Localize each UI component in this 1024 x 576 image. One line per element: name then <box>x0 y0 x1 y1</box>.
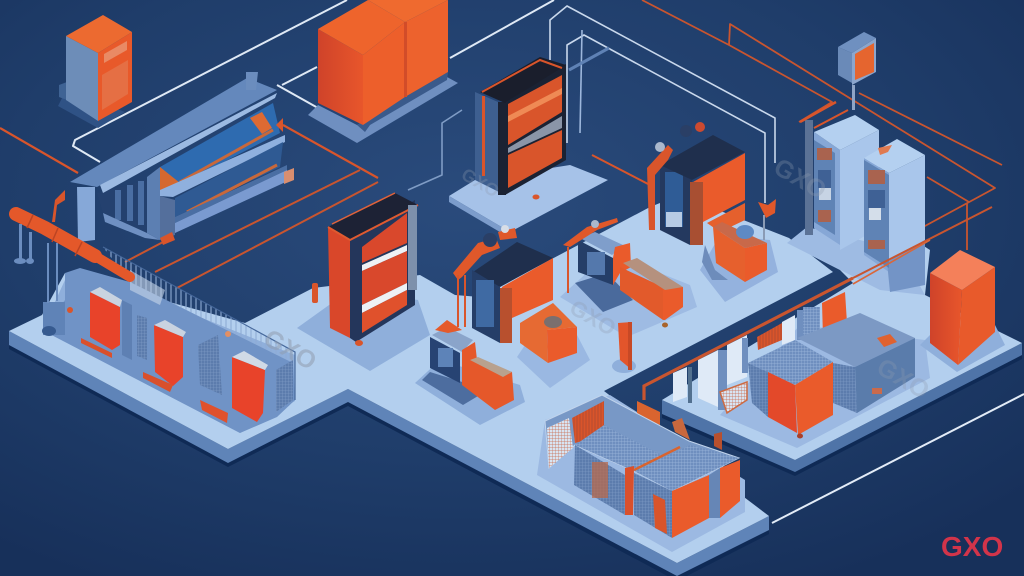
red mesh panel <box>757 323 782 350</box>
tower 2 <box>864 139 925 292</box>
orange box right <box>930 250 995 365</box>
machine: right of centre <box>563 218 683 328</box>
right platform machinery <box>644 207 992 438</box>
cabinet: top left <box>58 15 132 128</box>
floor shadows under machines <box>42 227 1005 552</box>
tower 1 <box>814 115 879 250</box>
watermark labels: GXO <box>872 353 934 405</box>
fence wall with orange panels <box>42 243 295 433</box>
centre machine with robot arm <box>453 225 577 363</box>
logo: GXO <box>941 531 1003 562</box>
big orange block <box>308 0 458 143</box>
orange panel 2 <box>154 320 186 386</box>
machine: rear centre on plate <box>449 57 608 238</box>
bottom machine <box>545 395 740 538</box>
watermark labels: GXO <box>458 164 503 201</box>
orange panel 1 <box>90 287 122 350</box>
rear grey box <box>797 313 915 413</box>
watermark labels: GXO <box>769 153 831 205</box>
orange pipe <box>14 214 130 277</box>
orange panel 3 <box>232 351 268 422</box>
watermark labels <box>259 153 934 405</box>
tall machine with three panels <box>312 193 418 346</box>
floor: main platform <box>9 195 833 576</box>
machine: rear right with small tank <box>647 122 776 282</box>
watermark labels: GXO <box>259 324 321 376</box>
front orange crate <box>748 340 833 438</box>
centre machine tank <box>520 303 577 363</box>
conveyor machine <box>52 72 294 245</box>
front machine with conveyor <box>422 320 514 410</box>
small red-orange post <box>618 322 632 370</box>
watermark labels: GXO <box>566 295 620 341</box>
towers <box>800 102 925 292</box>
orange back panel <box>822 292 847 337</box>
floor: right platform <box>662 205 1022 476</box>
small box on pole <box>838 32 876 110</box>
